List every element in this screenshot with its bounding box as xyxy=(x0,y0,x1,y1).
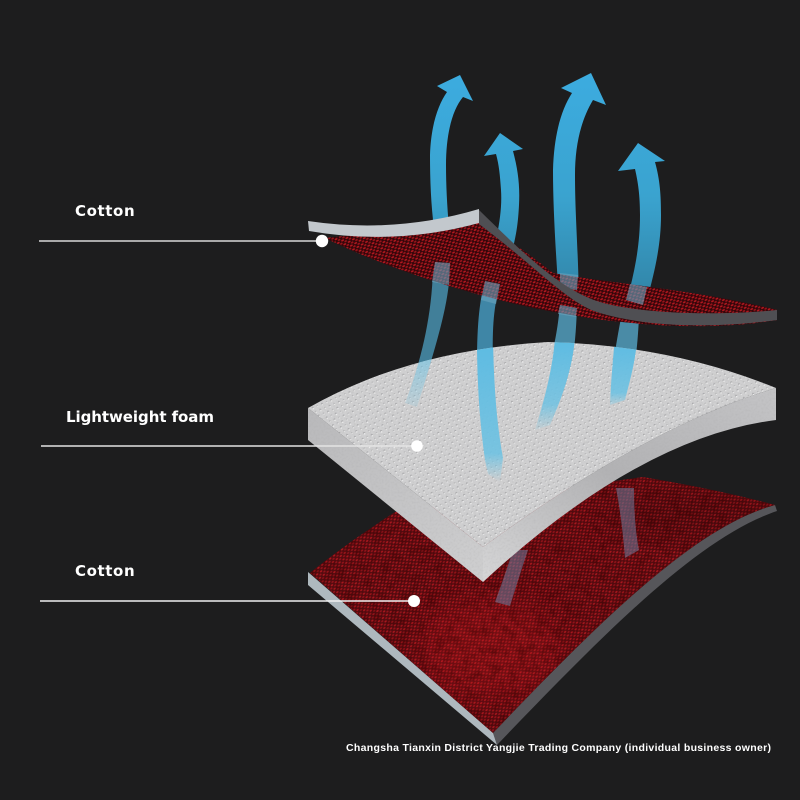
foam grain xyxy=(312,342,766,572)
tail 3 xyxy=(535,338,575,430)
tail 2 xyxy=(477,340,503,482)
label: top cotton xyxy=(39,202,328,247)
foam right side xyxy=(483,388,776,582)
foam left side xyxy=(308,408,483,582)
leader dot xyxy=(316,235,328,247)
label: lightweight foam xyxy=(41,408,423,452)
arrows below top layer xyxy=(405,262,639,407)
arrow traces seen through bottom layer xyxy=(495,488,639,606)
lower arrow 3 xyxy=(548,305,577,370)
patch 5 xyxy=(626,284,647,305)
trace right xyxy=(616,488,639,558)
arrow 4 xyxy=(618,143,665,300)
company caption: Changsha Tianxin District Yangjie Trading Company (individual business owner) xyxy=(346,742,771,754)
bottom layer light edge xyxy=(308,572,497,745)
leader line xyxy=(39,240,322,242)
trace left xyxy=(495,550,528,606)
bottom layer dark edge xyxy=(493,505,777,745)
patch 3 xyxy=(560,273,578,290)
blue patches on fabric xyxy=(432,262,647,317)
label: bottom cotton xyxy=(40,562,420,607)
panel: lightweight foam layer xyxy=(300,340,780,585)
lower arrow 2 xyxy=(477,280,500,365)
leader line xyxy=(40,600,414,602)
lower arrow 4 xyxy=(612,318,639,370)
arrow 1 xyxy=(430,75,473,228)
tail 1 xyxy=(405,359,432,407)
arrow 3 xyxy=(553,73,606,300)
patch 2 xyxy=(481,281,500,304)
label text: Cotton xyxy=(75,202,135,220)
foam top surface xyxy=(308,342,776,547)
arrow 2 xyxy=(484,133,523,248)
upward arrows xyxy=(430,73,665,300)
patch 4 xyxy=(558,305,577,317)
patch 1 xyxy=(432,262,450,285)
top layer dark edge xyxy=(479,210,777,325)
tail 4 xyxy=(610,346,636,405)
panel: bottom cotton layer xyxy=(300,470,780,745)
arrow tails over foam xyxy=(405,342,636,479)
leader line xyxy=(41,445,417,447)
top layer red fabric xyxy=(325,222,777,326)
label text: Lightweight foam xyxy=(66,408,214,426)
bottom layer fabric mottling xyxy=(300,470,780,740)
label text: Cotton xyxy=(75,562,135,580)
panel: top cotton layer xyxy=(308,209,777,326)
leader dot xyxy=(408,595,420,607)
bottom layer red fabric xyxy=(310,477,775,733)
top layer light edge xyxy=(308,209,479,237)
lower arrow 1 xyxy=(405,262,450,407)
leader dot xyxy=(411,440,423,452)
